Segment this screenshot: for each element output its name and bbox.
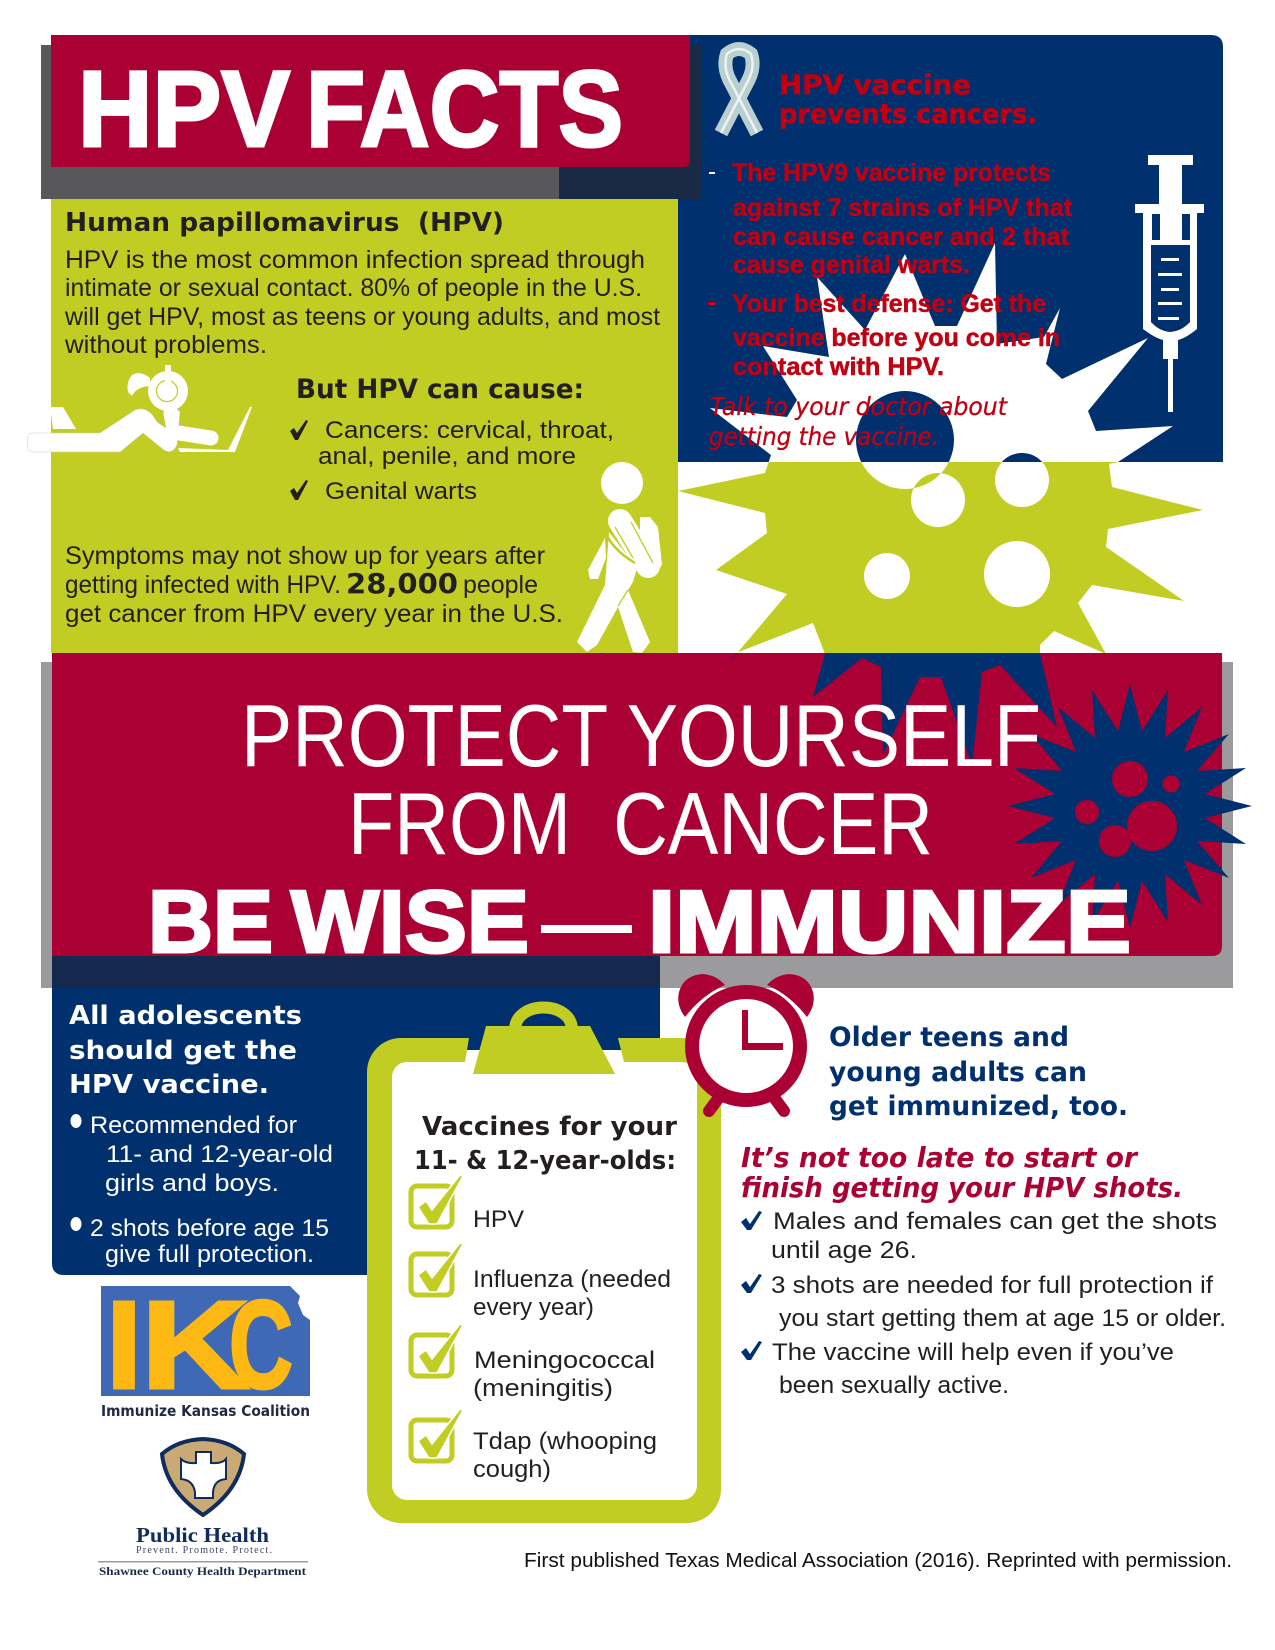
text block: symptoms and 28,000: get cancer from HPV every year in the U.S. <box>65 600 563 628</box>
icon: blue check <box>741 1211 762 1230</box>
logo: public health shield <box>162 1439 244 1515</box>
text block: vaccine prevents cancers: can cause cancer and 2 that <box>733 223 1070 251</box>
panel: protect yourself banner <box>52 653 1222 956</box>
banner headline: PROTECT YOURSELF <box>241 686 1041 785</box>
icon: clipboard <box>367 1008 721 1523</box>
icon: blue check <box>741 1274 762 1293</box>
text block: vaccines checklist heading <box>414 1112 677 1176</box>
panel: title shadow <box>41 45 702 199</box>
text block: older teens checklist: you start getting them at age 15 or older. <box>779 1305 1226 1332</box>
panel: protect yourself banner shadow <box>41 662 1233 988</box>
logo: Immunize Kansas Coalition: K <box>141 1276 249 1415</box>
panel: all adolescents: give full protection. <box>105 1241 314 1268</box>
panel: all adolescents: All adolescents <box>69 1001 302 1031</box>
panel: all adolescents: Recommended for <box>90 1112 297 1139</box>
icon: walking student <box>577 462 662 653</box>
banner headline: FROM CANCER <box>348 774 933 873</box>
text block: vaccine list: (meningitis) <box>473 1375 613 1402</box>
text block: older teens <box>829 1022 1128 1122</box>
panel: all adolescents: 11- and 12-year-old <box>106 1141 333 1168</box>
text block: but HPV can cause: Cancers: cervical, throat, <box>325 417 614 444</box>
banner headline <box>148 686 1131 971</box>
logo: Immunize Kansas Coalition: C <box>229 1276 293 1415</box>
icon: black check <box>290 420 308 440</box>
text block: older teens: get immunized, too. <box>829 1091 1128 1122</box>
text block: what is HPV: intimate or sexual contact. 80% of people in the U.S. <box>65 274 642 302</box>
text block: vaccine list: Influenza (needed <box>473 1266 671 1293</box>
logo text: Shawnee County Health Department <box>98 1523 308 1578</box>
text block: symptoms and 28,000: getting infected with HPV. <box>65 571 341 599</box>
text block: vaccine prevents cancers: vaccine before you come in <box>733 324 1060 352</box>
text block: vaccine prevents cancers: cause genital warts. <box>733 251 970 279</box>
banner headline: BE <box>148 872 273 971</box>
title banner: FACTS <box>306 48 623 169</box>
text block: vaccine prevents cancers: Talk to your doctor about <box>710 392 1008 421</box>
text block: vaccine prevents cancers: contact with HPV. <box>733 353 944 381</box>
text block: older teens checklist: been sexually active. <box>779 1372 1009 1399</box>
logo text: Shawnee County Health Department: Shawnee County Health Department <box>99 1566 306 1578</box>
icon: alarm clock <box>678 974 814 1111</box>
text block: older teens: Older teens and <box>829 1022 1069 1053</box>
logo: Immunize Kansas Coalition: Immunize Kansas Coalition <box>101 1402 310 1420</box>
text block: vaccine list: Tdap (whooping <box>473 1428 657 1455</box>
text block: vaccine prevents cancers: prevents cancers. <box>779 99 1037 130</box>
panel: all adolescents <box>52 988 660 1275</box>
icon: checkbox 3 <box>411 1324 463 1376</box>
text block: older teens checklist: The vaccine will help even if you’ve <box>772 1339 1174 1366</box>
text block: what is HPV: HPV is the most common infection spread through <box>65 246 645 274</box>
icon: black check <box>290 480 308 500</box>
icon: girl lying with laptop <box>27 365 252 452</box>
text block: vaccine list: every year) <box>473 1294 594 1321</box>
text block: attribution: First published Texas Medical Association (2016). Reprinted with permission. <box>524 1550 1232 1572</box>
text block: but HPV can cause: anal, penile, and more <box>318 443 576 470</box>
panel: all adolescents: girls and boys. <box>105 1170 279 1197</box>
virus graphic: small navy virus <box>1008 684 1252 928</box>
text block: not too late: finish getting your HPV shots. <box>741 1171 1183 1204</box>
virus graphic: green on white <box>678 462 1203 653</box>
text block: vaccines checklist heading: Vaccines for your <box>422 1112 677 1142</box>
text block: vaccine list: cough) <box>473 1456 551 1483</box>
text block: symptoms and 28,000: people <box>463 571 538 599</box>
banner headline: IMMUNIZE <box>648 872 1131 971</box>
panel: all adolescents: 2 shots before age 15 <box>90 1215 329 1242</box>
text block: but HPV can cause <box>290 374 614 505</box>
text block: vaccine prevents cancers <box>708 70 1073 451</box>
text block: vaccine prevents cancers: Your best defense: Get the <box>732 290 1046 318</box>
text block: symptoms and 28,000: 28,000 <box>346 567 458 600</box>
icon: checkbox 2 <box>411 1243 463 1295</box>
logo text: Shawnee County Health Department: Public Health <box>136 1523 269 1547</box>
text block: vaccine list <box>473 1206 671 1483</box>
icon: syringe <box>1135 155 1204 412</box>
icon: checkbox 4 <box>411 1409 463 1461</box>
virus graphic: navy lower spikes <box>728 653 1057 760</box>
text block: symptoms and 28,000 <box>65 542 563 628</box>
banner headline: WISE <box>291 872 529 971</box>
text block: vaccine prevents cancers: against 7 strains of HPV that <box>733 194 1073 222</box>
title banner <box>51 35 690 169</box>
text block: symptoms and 28,000: Symptoms may not show up for years after <box>65 542 545 570</box>
icon: awareness ribbon <box>721 49 757 133</box>
text block: what is HPV: will get HPV, most as teens or young adults, and most <box>64 303 660 331</box>
text block: vaccines checklist heading: 11- & 12-year-olds: <box>414 1146 676 1176</box>
text block: older teens checklist: Males and females can get the shots <box>773 1208 1217 1235</box>
text block: older teens checklist: until age 26. <box>771 1237 917 1264</box>
logo text: Shawnee County Health Department: Prevent. Promote. Protect. <box>136 1545 272 1556</box>
text block: not too late: It’s not too late to start or <box>741 1141 1139 1174</box>
text block: not too late <box>741 1141 1183 1204</box>
panel: green HPV facts background <box>51 199 678 653</box>
icon: blue check <box>741 1341 762 1360</box>
text block: older teens checklist: 3 shots are needed for full protection if <box>771 1272 1213 1299</box>
text block: but HPV can cause: But HPV can cause: <box>296 374 584 405</box>
logo: Immunize Kansas Coalition <box>101 1276 310 1420</box>
panel: navy vaccine background <box>678 35 1223 462</box>
text block: older teens: young adults can <box>829 1057 1087 1088</box>
text block: vaccine list: HPV <box>473 1206 524 1233</box>
text block: but HPV can cause: Genital warts <box>325 478 477 505</box>
icon: checkbox 1 <box>411 1175 463 1227</box>
text block: what is HPV <box>64 208 660 359</box>
text block: vaccine prevents cancers: The HPV9 vaccine protects <box>732 159 1051 187</box>
panel: all adolescents: HPV vaccine. <box>69 1070 269 1100</box>
logo: Immunize Kansas Coalition: I <box>106 1276 142 1415</box>
text block: older teens checklist <box>741 1208 1226 1399</box>
text block: vaccine list: Meningococcal <box>474 1347 655 1374</box>
title banner: HPV <box>78 48 290 169</box>
panel: all adolescents: should get the <box>69 1036 297 1066</box>
virus graphic: white on navy <box>710 243 1173 462</box>
text block: what is HPV: without problems. <box>64 331 267 359</box>
text block: vaccine prevents cancers: HPV vaccine <box>779 70 971 101</box>
text block: vaccine prevents cancers: getting the vaccine. <box>709 422 939 451</box>
text block: what is HPV: Human papillomavirus (HPV) <box>65 208 504 238</box>
